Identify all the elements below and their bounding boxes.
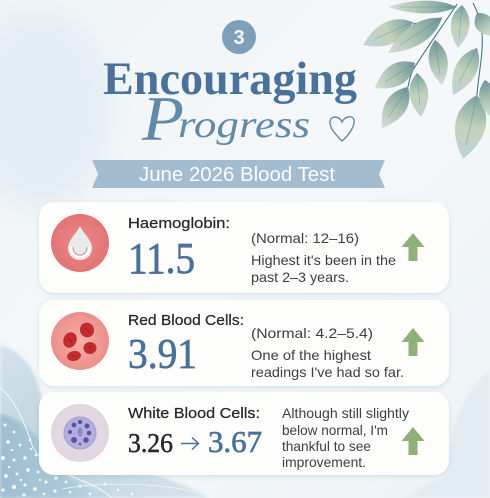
note: Haemoglobin: past 2–3 years. [251,270,349,285]
note: Red Blood Cells: readings I've had so far. [251,365,404,380]
note: Red Blood Cells: One of the highest [251,348,371,363]
note: White Blood Cells: thankful to see [282,439,371,454]
subtitle: Progress: rogress [178,104,310,146]
ribbon: June 2026 Blood Test [92,160,385,188]
icon: white blood cell [51,404,109,462]
icon: blood drop [51,214,109,272]
label: White Blood Cells: White Blood Cells: [128,405,260,422]
arrow: up [402,328,424,356]
icon: red blood cells [51,312,109,370]
panel: White Blood Cells [39,392,449,475]
watercolor wash: bottom left [0,345,208,498]
note: White Blood Cells: below normal, I'm [282,423,388,438]
note: Haemoglobin: Highest it's been in the [251,253,396,268]
note: White Blood Cells: Although still slightly [282,406,409,421]
arrow: up [402,427,424,455]
step number badge: 3 [233,27,245,49]
value: 11.5: 11.5 [128,234,195,283]
watercolor wash: top left [0,10,110,210]
title: Encouraging: Encouraging [103,53,357,105]
value: previous 3.26: 3.26 [128,428,173,458]
panel: Haemoglobin [39,202,449,293]
icon: heart [330,117,354,141]
step number badge [222,20,256,54]
value: 3.91: 3.91 [128,332,197,378]
ribbon: June 2026 Blood Test: June 2026 Blood Test [139,164,335,186]
arrow: up [402,233,424,261]
note: White Blood Cells: improvement. [282,455,366,470]
value: current 3.67: 3.67 [208,424,262,459]
label: Red Blood Cells: Red Blood Cells: [128,312,244,329]
panel: Red Blood Cells [39,300,449,386]
normal range: 4.2–5.4: (Normal: 4.2–5.4) [251,326,373,341]
subtitle: Progress: P [141,83,184,154]
leaf branch decoration [358,1,490,162]
label: Haemoglobin: Haemoglobin: [128,215,230,232]
arrow: to [181,438,198,450]
normal range: 12–16: (Normal: 12–16) [251,231,359,246]
watercolor wash: bottom right [400,370,490,498]
